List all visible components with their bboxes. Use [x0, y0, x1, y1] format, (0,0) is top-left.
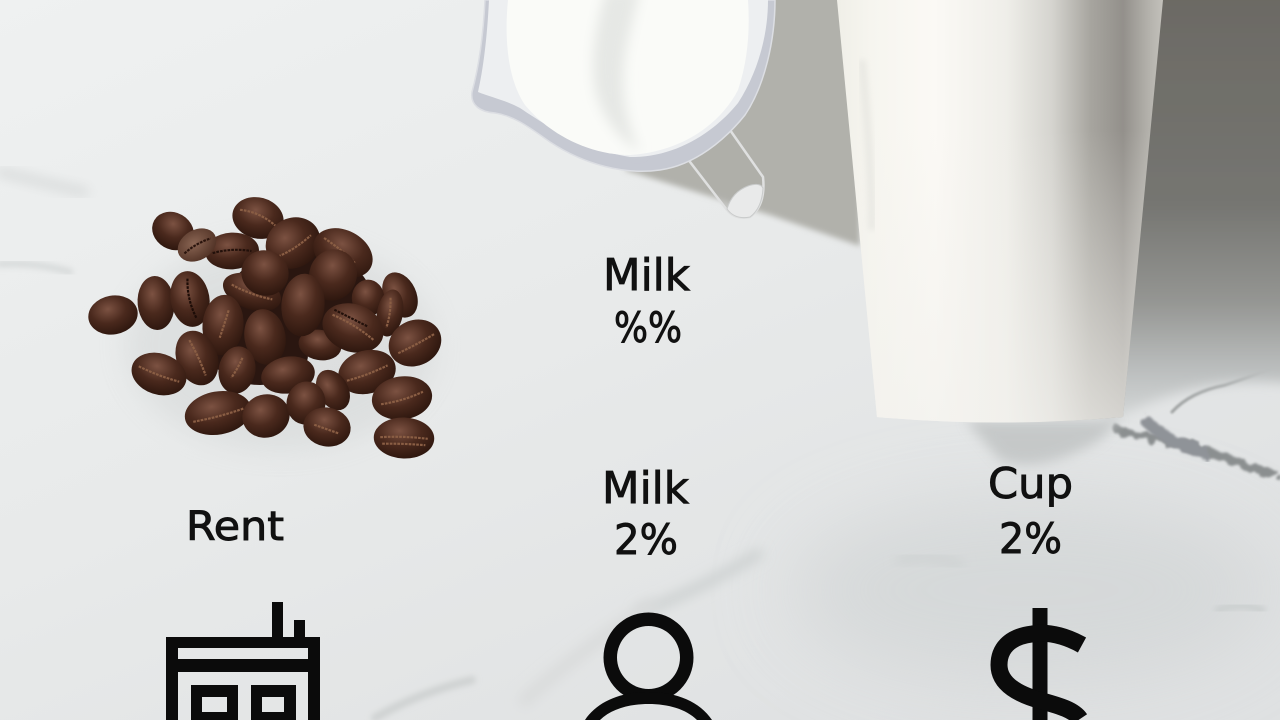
icon: building: [166, 602, 320, 720]
jug handle: [687, 130, 763, 218]
label: Milk 2%: 2%: [614, 515, 678, 564]
photo: pile of coffee beans: [85, 191, 449, 460]
label: Rent: Rent: [186, 504, 284, 550]
label: Milk %%: Milk: [603, 250, 691, 301]
icon: person: [585, 612, 712, 720]
shadow: jug and cup cast on the marble: [625, 0, 1280, 464]
photo: measuring jug with milk: [472, 0, 775, 218]
label: Milk 2%: Milk: [602, 463, 690, 514]
label: Milk %%: %%: [614, 303, 682, 352]
label: Cup 2%: 2%: [999, 514, 1062, 563]
label: Cup 2%: [988, 459, 1073, 563]
milk surface: [507, 0, 749, 155]
label: Milk 2%: [602, 463, 690, 564]
icon: dollar sign: [999, 608, 1082, 720]
jug body: [472, 0, 775, 171]
photo: paper cup: [837, 0, 1163, 422]
label: Cup 2%: Cup: [988, 459, 1073, 508]
label: Milk %%: [603, 250, 691, 352]
